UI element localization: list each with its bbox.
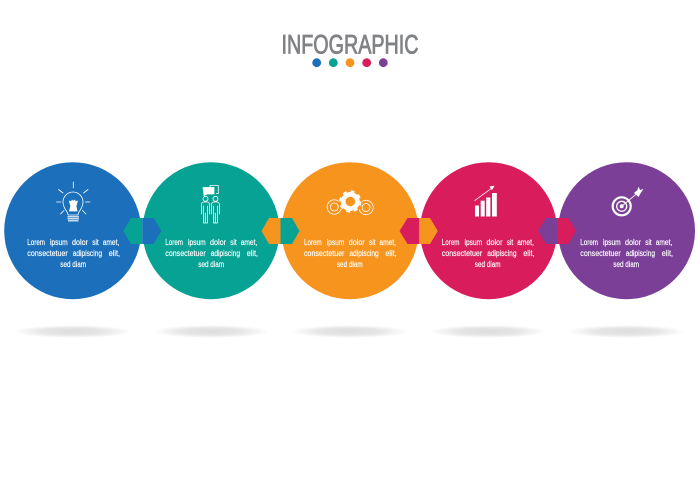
text block: step 4: sed diam	[475, 260, 501, 269]
circle: step 3 orange	[282, 162, 418, 299]
text block: step 5: consectetuer	[580, 249, 621, 258]
text block: step 3: Lorem	[304, 238, 322, 247]
text block: step 4	[442, 238, 534, 269]
text block: step 3: sed diam	[337, 260, 363, 269]
circle: step 1 blue	[4, 162, 141, 299]
text block: step 5: sed diam	[613, 260, 639, 269]
text block: step 1: amet,	[103, 238, 119, 247]
text block: step 5: sit	[645, 238, 652, 247]
text block: step 3	[304, 238, 397, 269]
text block: step 2: dolor	[210, 238, 226, 247]
text block: step 4: elit,	[523, 249, 534, 258]
circle: step 4 pink	[420, 162, 557, 299]
ground shadows	[14, 325, 684, 338]
text block: step 4: amet,	[517, 238, 534, 247]
circle: step 2 teal	[142, 162, 280, 299]
text block: step 2: consectetuer	[165, 249, 206, 258]
circle: step 5 purple	[558, 162, 695, 299]
text block: step 5: elit,	[662, 249, 673, 258]
text block: step 1: dolor	[72, 238, 88, 247]
text block: step 3: ipsum	[327, 238, 345, 247]
text block: step 1: ipsum	[50, 238, 68, 247]
text block: step 3: adipiscing	[349, 249, 379, 258]
text block: step 2: ipsum	[188, 238, 206, 247]
text block: step 4: ipsum	[464, 238, 482, 247]
text block: step 3: dolor	[349, 238, 365, 247]
text block: step 5: amet,	[656, 238, 672, 247]
title: INFOGRAPHIC	[282, 30, 418, 60]
text block: step 1	[27, 238, 120, 269]
icon: target with arrow	[613, 186, 644, 215]
text block: step 1: consectetuer	[27, 249, 68, 258]
text block: step 1: adipiscing	[73, 249, 102, 258]
text block: step 2: sit	[230, 238, 237, 247]
connector hexagon 3-4	[400, 218, 438, 244]
text block: step 4: consectetuer	[442, 249, 482, 258]
text block: step 5	[580, 238, 673, 269]
title colour dots	[312, 58, 388, 67]
text block: step 3: sit	[369, 238, 376, 247]
text block: step 3: amet,	[379, 238, 396, 247]
icon: gears	[327, 190, 373, 215]
connector hexagon 1-2	[123, 218, 161, 244]
text block: step 3: consectetuer	[304, 249, 345, 258]
text block: step 3: elit,	[385, 249, 397, 258]
text block: step 4: Lorem	[442, 238, 460, 247]
text block: step 2: elit,	[247, 249, 258, 258]
text block: step 5: Lorem	[580, 238, 598, 247]
text block: step 5: dolor	[625, 238, 641, 247]
text block: step 1: sed diam	[60, 260, 86, 269]
connector hexagon 4-5	[538, 218, 576, 244]
text block: step 2: adipiscing	[211, 249, 240, 258]
text block: step 5: ipsum	[603, 238, 621, 247]
text block: step 1: sit	[92, 238, 99, 247]
text block: step 4: sit	[507, 238, 514, 247]
text block: step 1: Lorem	[27, 238, 45, 247]
text block: step 2: amet,	[241, 238, 257, 247]
icon: light bulb	[56, 182, 90, 221]
icon: rising bar chart with arrow	[474, 186, 497, 216]
text block: step 4: dolor	[486, 238, 503, 247]
text block: step 4: adipiscing	[487, 249, 516, 258]
text block: step 1: elit,	[109, 249, 120, 258]
text block: step 5: adipiscing	[626, 249, 655, 258]
connector hexagon 2-3	[262, 218, 300, 244]
text block: step 2	[165, 238, 258, 269]
icon: two people with speech bubbles	[202, 186, 220, 223]
text block: step 2: sed diam	[198, 260, 224, 269]
text block: step 2: Lorem	[165, 238, 183, 247]
